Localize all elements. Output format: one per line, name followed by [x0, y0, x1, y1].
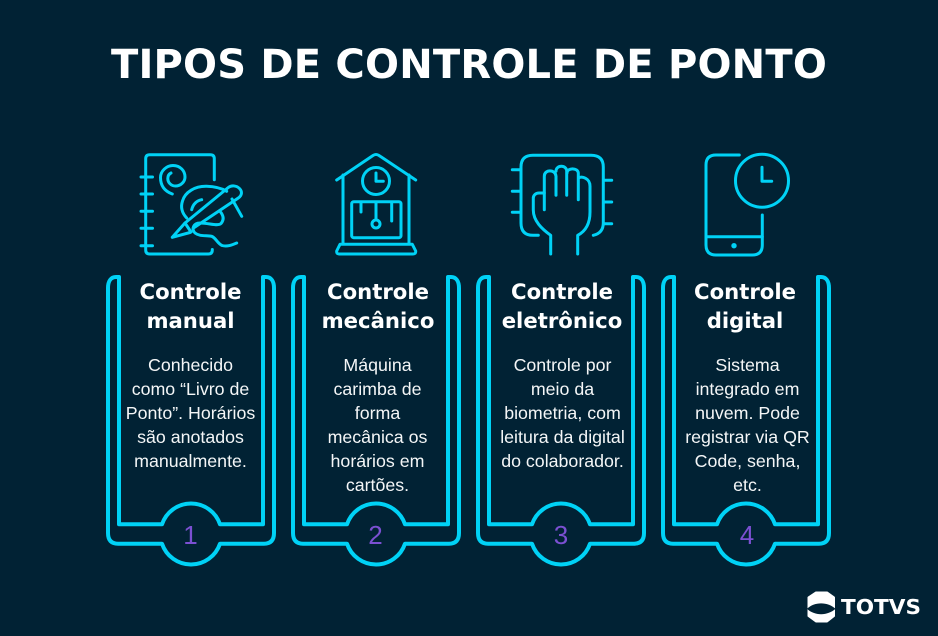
panel: controle digital: [663, 277, 829, 565]
heading 2: Controle: [327, 279, 429, 304]
logo: TOTVS: TOTVS: [841, 595, 921, 619]
number 2: 2: [368, 520, 383, 550]
text 2: horários em: [331, 451, 424, 471]
text 4: nuvem. Pode: [695, 403, 800, 423]
heading 4: Controle: [694, 279, 796, 304]
text 1: Conhecido: [148, 355, 233, 375]
text 4: Code, senha,: [695, 451, 800, 471]
text 1: Ponto”. Horários: [126, 403, 255, 423]
card frame 4: [663, 277, 829, 565]
panel: controle mecanico: mecânico: [322, 308, 434, 333]
title: TIPOS DE CONTROLE DE PONTO: [111, 42, 827, 88]
text 4: [685, 355, 810, 495]
icon: punch clock: [337, 154, 416, 254]
number 1: 1: [183, 520, 198, 550]
text 3: Controle por: [514, 355, 611, 375]
text 1: como “Livro de: [132, 379, 249, 399]
text 2: Máquina: [343, 355, 412, 375]
panel: controle digital: digital: [707, 308, 783, 333]
icon: notebook and pen: [141, 155, 242, 254]
text 4: etc.: [733, 475, 762, 495]
number 4: 4: [740, 520, 754, 550]
icon: phone with clock: [706, 154, 788, 255]
text 1: manualmente.: [134, 451, 247, 471]
text 3: do colaborador.: [501, 451, 624, 471]
text 2: [328, 355, 428, 495]
text 1: [126, 355, 255, 471]
text 3: biometria, com: [504, 403, 621, 423]
text 2: mecânica os: [328, 427, 428, 447]
text 2: carimba de: [334, 379, 422, 399]
icon: hand on biometric reader: [512, 155, 612, 254]
heading 3: Controle: [511, 279, 613, 304]
text 1: são anotados: [137, 427, 244, 447]
card frame 2: [293, 277, 459, 565]
text 2: cartões.: [346, 475, 409, 495]
text 3: meio da: [531, 379, 594, 399]
text 3: [500, 355, 625, 471]
panel: controle mecanico: [293, 277, 459, 565]
panel: controle eletronico: [478, 277, 644, 565]
logo: TOTVS: [807, 592, 921, 622]
text 2: forma: [355, 403, 400, 423]
text 3: leitura da digital: [500, 427, 625, 447]
number 3: 3: [554, 520, 568, 550]
panel: controle manual: [108, 277, 274, 565]
panel: controle eletronico: eletrônico: [502, 308, 622, 333]
text 4: integrado em: [696, 379, 799, 399]
panel: controle manual: manual: [146, 308, 235, 333]
text 4: Sistema: [715, 355, 780, 375]
heading 1: Controle: [140, 279, 241, 304]
card frame 1: [108, 277, 274, 565]
text 4: registrar via QR: [685, 427, 810, 447]
card frame 3: [478, 277, 644, 565]
